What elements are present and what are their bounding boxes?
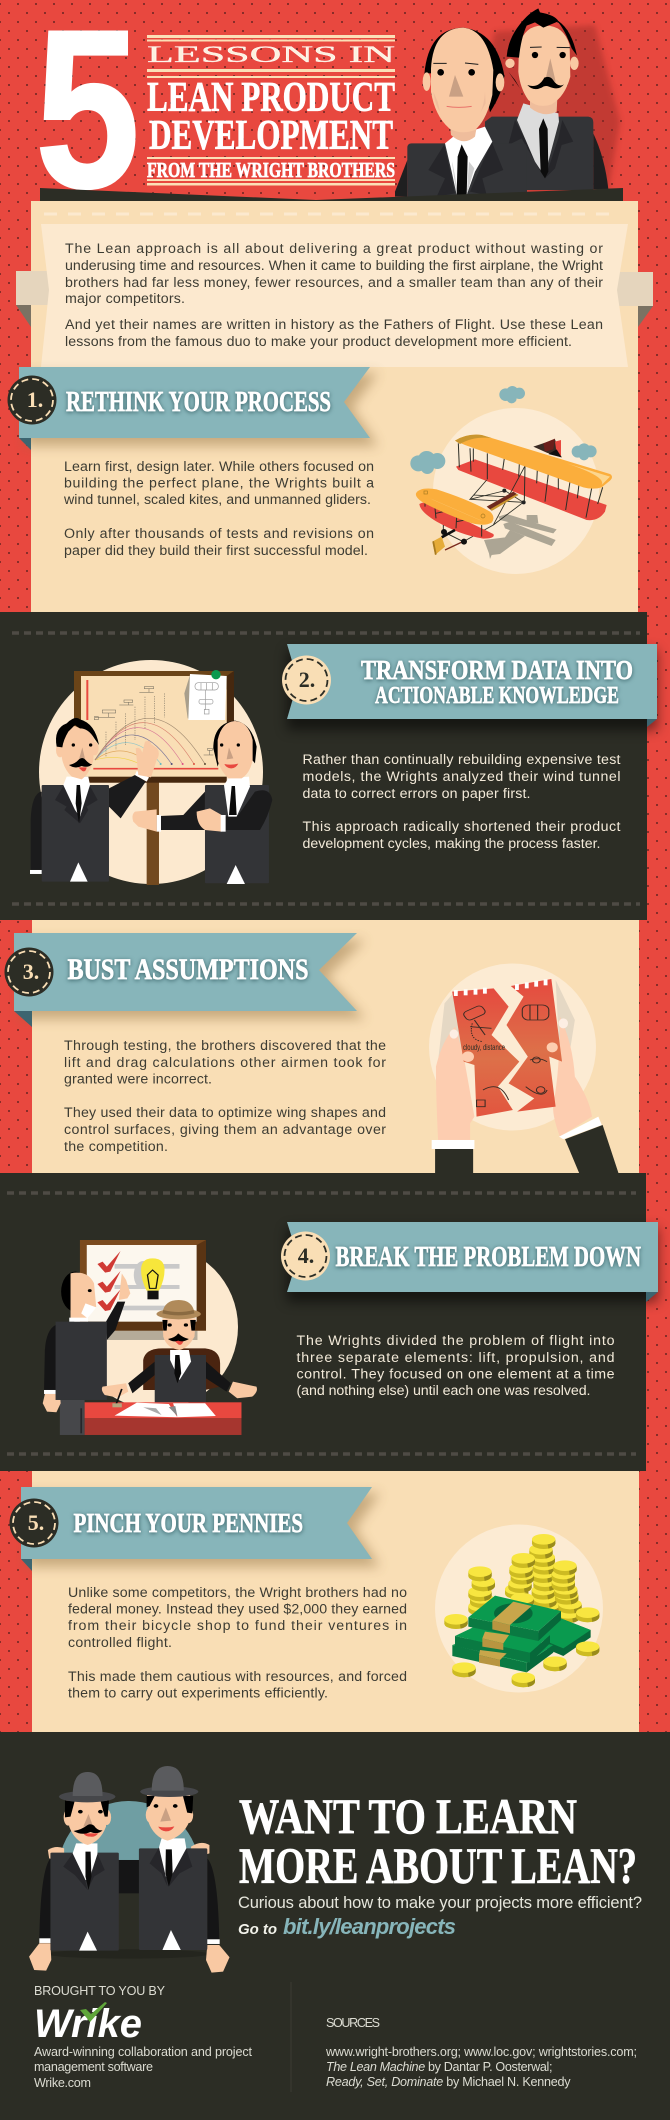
loose coins — [452, 1641, 599, 1687]
badge 3: 3. — [23, 959, 39, 984]
top wing — [455, 435, 612, 489]
dark bar under the title — [40, 188, 623, 201]
section 5 text: from their bicycle shop to fund their ventures in — [68, 1618, 407, 1634]
panel: break the problem down — [0, 1173, 646, 1471]
title — [35, 0, 396, 235]
left man in hat — [29, 1772, 119, 1971]
heading 3: BUST ASSUMPTIONS — [68, 953, 308, 986]
panel: rethink your process (cream page) — [31, 201, 638, 612]
title line 2: LEAN PRODUCT — [147, 74, 395, 121]
seated man with hat — [102, 1300, 257, 1402]
fingers — [462, 1051, 474, 1062]
section 2 text: models, the Wrights analyzed their wind tunnel — [302, 769, 620, 785]
intro text: The Lean approach is all about delivering a great product without wasting or — [65, 241, 603, 257]
footer: brought to you by: Wrike.com — [34, 2076, 91, 2090]
badge 1: 1. — [27, 387, 43, 412]
section 1 text — [63, 459, 374, 559]
call to action heading — [239, 1788, 637, 1895]
chart axes — [84, 680, 90, 720]
section 3 text: granted were incorrect. — [64, 1072, 212, 1088]
intro text: lessons from the famous duo to make your product development more efficient. — [65, 334, 572, 350]
right man in hat — [139, 1766, 230, 1973]
heading 1: RETHINK YOUR PROCESS — [66, 386, 331, 418]
title line 4: FROM THE WRIGHT BROTHERS — [147, 158, 395, 182]
notebook doodles — [462, 1005, 549, 1107]
chart curves — [94, 687, 213, 764]
front elevator lower — [419, 503, 494, 539]
panel: pinch your pennies — [32, 1471, 639, 1732]
intro text: And yet their names are written in history as the Fathers of Flight. Use these Lean — [65, 317, 603, 333]
section 1 text: Learn first, design later. While others focused on — [64, 459, 374, 475]
plane shadow — [484, 514, 557, 559]
heading 5: PINCH YOUR PENNIES — [74, 1507, 303, 1538]
section 2 text: Rather than continually rebuilding expensive test — [302, 752, 621, 768]
badge 2 — [282, 656, 331, 704]
call to action text: bit.ly/leanprojects — [283, 1914, 456, 1939]
bald man — [132, 721, 272, 884]
lower wing — [456, 459, 607, 520]
illustration: hands tearing notebook — [429, 964, 618, 1173]
section 4 text: (and nothing else) until each one was resolved. — [296, 1383, 590, 1399]
intro text — [65, 241, 603, 350]
front elevator upper — [416, 489, 493, 525]
badge 5 — [10, 1498, 58, 1548]
section 5 text: controlled flight. — [68, 1635, 172, 1651]
linked arms — [115, 1860, 143, 1893]
call to action text: Go to — [238, 1921, 277, 1938]
chart board — [74, 671, 234, 783]
section 3 text: the competition. — [64, 1139, 168, 1155]
call to action text — [238, 1894, 642, 1939]
title stripes — [147, 35, 395, 186]
section 4 text: three separate elements: lift, propulsion, and — [296, 1350, 614, 1366]
left hand — [436, 1027, 474, 1140]
section 1 text: building the perfect plane, the Wrights built a — [64, 476, 374, 492]
board stand — [147, 781, 159, 885]
section 3 text — [64, 1038, 386, 1155]
section 3 heading ribbon — [4, 933, 365, 1027]
badge 4: 4. — [298, 1243, 314, 1268]
illustration: brothers at the chart — [30, 660, 272, 885]
section 3 text: Through testing, the brothers discovered that the — [64, 1038, 386, 1054]
footer: sources: The Lean Machine by Dantar P. Oosterwal; — [326, 2060, 552, 2074]
section 5 text — [68, 1585, 407, 1702]
sleeves — [435, 1149, 473, 1173]
footer: brought to you by: BROUGHT TO YOU BY — [34, 1984, 166, 1998]
footer: sources: SOURCES — [326, 2016, 380, 2030]
pointing man — [43, 1272, 130, 1435]
footer: brought to you by: Award-winning collaboration and project — [34, 2045, 252, 2059]
section 2 text: This approach radically shortened their product — [302, 819, 621, 835]
panel: transform data — [0, 612, 647, 920]
illustration: brothers with checklist — [43, 1240, 257, 1435]
section 2 text: data to correct errors on paper first. — [302, 786, 530, 802]
footer: sources — [325, 2016, 637, 2089]
section 1 heading ribbon — [8, 367, 378, 450]
section 3 text: lift and drag calculations other airmen took for — [64, 1055, 386, 1071]
section 2 text: development cycles, making the process faster. — [302, 836, 600, 852]
panel: bust assumptions — [32, 920, 639, 1173]
section 3 text: control surfaces, giving them an advantage over — [64, 1122, 386, 1138]
header illustration: the Wright brothers — [395, 8, 620, 198]
badge 1 — [8, 376, 56, 424]
section 1 text: paper did they build their first successful model. — [64, 543, 368, 559]
heading 2 — [361, 654, 633, 709]
badge 2: 2. — [299, 667, 315, 692]
badge 5: 5. — [28, 1510, 44, 1535]
plane tail — [533, 439, 562, 457]
section 1 text: Only after thousands of tests and revisions on — [64, 526, 374, 542]
rigging — [463, 466, 525, 542]
section 5 heading ribbon — [10, 1487, 380, 1571]
intro text: underusing time and resources. When it came to building the first airplane, the Wright — [65, 258, 603, 274]
section 5 text: This made them cautious with resources, and forced — [68, 1669, 407, 1685]
intro text: major competitors. — [65, 291, 185, 307]
footer: sources: www.wright-brothers.org; www.loc.gov; wrightstories.com; — [325, 2045, 637, 2059]
banknotes — [452, 1596, 591, 1672]
section 5 text: federal money. Instead they used $2,000 they earned — [68, 1602, 407, 1618]
footer: brought to you by: management software — [34, 2060, 153, 2074]
struts — [458, 443, 603, 518]
cloud icons — [410, 386, 597, 474]
title line 3: DEVELOPMENT — [149, 112, 393, 159]
front boom — [442, 530, 455, 537]
section 5 text: Unlike some competitors, the Wright brothers had no — [68, 1585, 407, 1601]
footer panel — [0, 1732, 670, 2120]
section 4 heading ribbon — [281, 1222, 658, 1302]
logo: Wrike: Wrike — [34, 2002, 142, 2046]
panel: intro — [41, 224, 628, 367]
intro text: brothers had far less money, fewer resources, and a smaller team than any of their — [65, 275, 603, 291]
section 4 text — [296, 1333, 615, 1399]
notebook label: cloudy, distance — [463, 1042, 505, 1052]
section 4 text: The Wrights divided the problem of flight into — [296, 1333, 615, 1349]
illustration: brothers in hats — [29, 1766, 230, 1973]
ribbon tabs behind the intro panel — [16, 271, 653, 327]
section 2 text — [302, 752, 621, 852]
call to action heading: WANT TO LEARN — [239, 1788, 577, 1844]
desk — [85, 1402, 241, 1418]
title line 1: LESSONS IN — [147, 42, 396, 67]
pinned paper — [184, 675, 195, 720]
illustration: coins and cash — [435, 1524, 603, 1692]
man with mustache — [30, 718, 159, 882]
footer: brought to you by — [34, 1984, 252, 2090]
torn notebook — [452, 988, 519, 1117]
coin stacks — [444, 1534, 599, 1629]
right hand — [553, 1017, 592, 1137]
footer: sources: Ready, Set, Dominate by Michael N. Kennedy — [326, 2075, 571, 2089]
section 5 text: them to carry out experiments efficiently. — [68, 1686, 328, 1702]
light bulb — [134, 1261, 153, 1289]
call to action text: Curious about how to make your projects more efficient? — [238, 1894, 642, 1912]
front struts — [425, 502, 482, 542]
section 3 text: They used their data to optimize wing shapes and — [64, 1105, 386, 1121]
badge 4 — [281, 1232, 330, 1280]
checklist board — [80, 1240, 206, 1331]
badge 3 — [4, 948, 54, 996]
section 1 text: wind tunnel, scaled kites, and unmanned gliders. — [63, 492, 371, 508]
section 4 text: control. They focused on one element at a time — [296, 1366, 615, 1382]
section 2 heading ribbon — [282, 644, 657, 730]
icon: biplane with clouds — [410, 386, 612, 574]
